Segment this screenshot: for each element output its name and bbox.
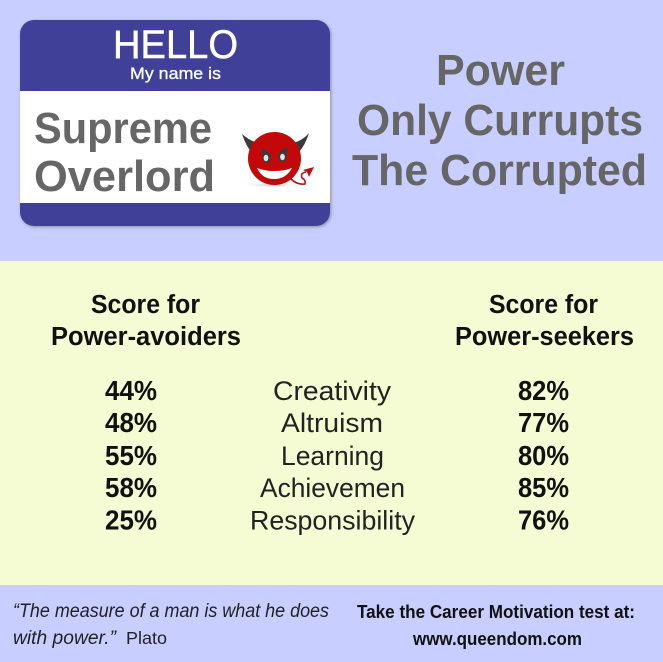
motivation categories: Creativity xyxy=(273,376,392,406)
panel: score comparison xyxy=(0,261,663,585)
motivation categories: Learning xyxy=(281,441,384,471)
power-avoider scores: 44% xyxy=(105,375,157,406)
badge heading: HELLO: HELLO xyxy=(113,23,238,67)
power-seeker scores: 76% xyxy=(518,504,569,536)
power-seeker scores xyxy=(518,375,569,536)
motivation categories: Altruism xyxy=(281,408,383,438)
badge subheading: My name is: My name is xyxy=(130,64,221,83)
title: The Corrupted xyxy=(352,146,647,195)
power-seeker scores: 77% xyxy=(518,407,569,438)
motivation categories xyxy=(250,376,415,536)
column heading: power-avoiders: Power-avoiders xyxy=(51,323,241,351)
power-avoider scores: 55% xyxy=(105,440,157,471)
title xyxy=(352,46,647,195)
motivation categories: Responsibility xyxy=(250,506,415,536)
badge name text: Overlord xyxy=(34,152,215,201)
power-seeker scores: 85% xyxy=(518,472,569,503)
title: Power xyxy=(436,46,565,95)
power-seeker scores: 82% xyxy=(518,375,569,406)
power-avoider scores xyxy=(105,375,157,536)
motivation categories: Achievemen xyxy=(260,473,405,503)
badge name text: Supreme xyxy=(34,104,212,153)
quote: with power.” xyxy=(13,628,118,649)
title: Only Currupts xyxy=(357,96,643,145)
name tag badge xyxy=(20,20,330,226)
call to action: www.queendom.com xyxy=(412,629,582,649)
call to action xyxy=(357,602,635,649)
power-avoider scores: 48% xyxy=(105,407,157,438)
badge name text xyxy=(34,104,215,201)
quote xyxy=(13,601,329,649)
column heading: power-seekers xyxy=(455,291,634,351)
power-seeker scores: 80% xyxy=(518,440,569,471)
quote: Plato xyxy=(126,628,167,648)
column heading: power-seekers: Power-seekers xyxy=(455,323,634,351)
power-avoider scores: 58% xyxy=(105,472,157,503)
icon: red devil face xyxy=(242,132,314,188)
column heading: power-avoiders xyxy=(51,291,241,351)
power-avoider scores: 25% xyxy=(105,504,157,536)
call to action: Take the Career Motivation test at: xyxy=(357,602,635,622)
quote: “The measure of a man is what he does xyxy=(13,601,329,622)
column heading: power-seekers: Score for xyxy=(489,291,598,319)
column heading: power-avoiders: Score for xyxy=(91,291,200,319)
